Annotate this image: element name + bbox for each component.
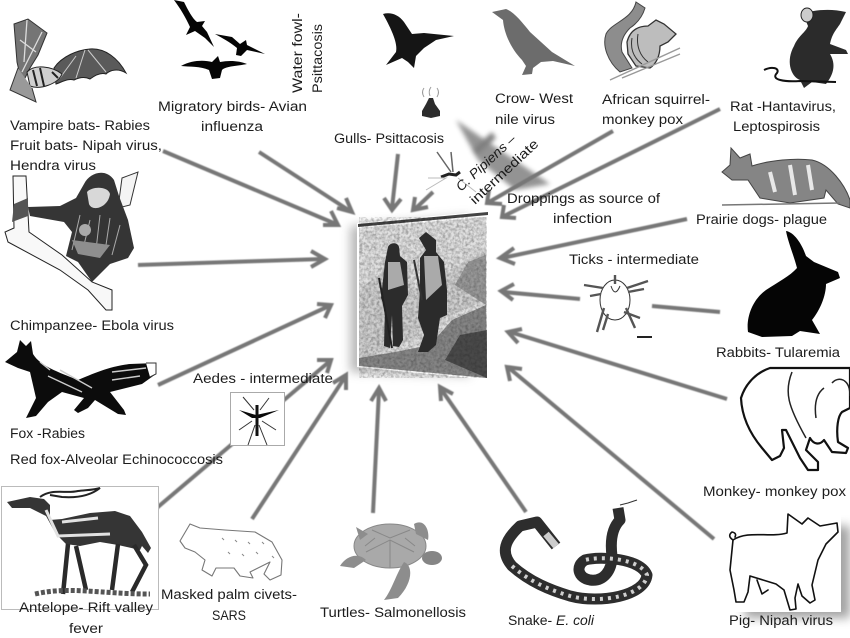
- label: prairie dogs: Prairie dogs- plague: [696, 212, 827, 227]
- label: antelope: Antelope- Rift valley: [19, 600, 153, 615]
- label: African squirrel: African squirrel-: [602, 92, 710, 107]
- icon: antelope in frame: [2, 486, 158, 610]
- label: red fox: Red fox-Alveolar Echinococcosis: [10, 452, 223, 467]
- icon: droppings: [422, 87, 440, 118]
- arrow: pig to centre: [507, 367, 714, 539]
- label: turtles: Turtles- Salmonellosis: [320, 605, 466, 620]
- label: antelope: fever: [69, 621, 104, 636]
- label: vampire and fruit bats: Vampire bats- Rabies: [10, 118, 150, 133]
- label: masked palm civets: [161, 587, 297, 623]
- label: water fowl (vertical): Psittacosis: [310, 24, 325, 93]
- icon: prairie dog: [722, 148, 850, 208]
- label: C. pipiens rotated: intermediate: [467, 136, 541, 207]
- label: crow: Crow- West: [495, 91, 573, 106]
- label: C. pipiens rotated: [453, 131, 541, 207]
- icon: rabbit: [748, 231, 840, 337]
- arrow: fox to centre: [158, 304, 331, 385]
- figure: left man: [381, 243, 408, 348]
- label: African squirrel: monkey pox: [602, 112, 683, 127]
- icon: monkey: [741, 368, 850, 470]
- icon: African squirrel: [605, 2, 680, 80]
- label: antelope: [19, 600, 153, 636]
- icon: eagle: [383, 13, 454, 68]
- label: vampire and fruit bats: Hendra virus: [10, 158, 96, 173]
- arrow: culex mosquito to centre: [413, 192, 433, 210]
- arrow: snake to centre: [440, 387, 526, 512]
- label: water fowl (vertical): Water fowl-: [290, 13, 305, 93]
- figure: right man: [418, 232, 447, 352]
- icon: tick: [584, 275, 652, 337]
- arrow: civet to centre: [252, 375, 346, 519]
- icon: pig with shadowed panel: [727, 512, 850, 618]
- icon: chimpanzee: [5, 172, 138, 310]
- shadow cone behind C. Pipiens label: [456, 120, 550, 190]
- label: monkey: Monkey- monkey pox: [703, 484, 846, 499]
- label: migratory birds: [158, 99, 307, 134]
- label: C. pipiens rotated: C. Pipiens –: [453, 131, 519, 194]
- label: Aedes: Aedes - intermediate: [193, 371, 333, 386]
- label: snake: Snake- E. coli: [508, 613, 595, 628]
- label: rat: [730, 99, 836, 134]
- label: rabbits: Rabbits- Tularemia: [716, 345, 841, 360]
- arrow: turtle to centre: [371, 388, 386, 513]
- arrow: squirrel to centre: [487, 131, 613, 204]
- label: droppings: Droppings as source of: [507, 191, 660, 206]
- label: water fowl (vertical): [290, 13, 325, 93]
- label: fox: Fox -Rabies: [10, 426, 85, 441]
- label: crow: nile virus: [495, 112, 555, 127]
- arrow: migratory birds to centre: [259, 152, 352, 212]
- arrow: monkey to centre: [508, 329, 727, 399]
- label: droppings: infection: [553, 211, 612, 226]
- label: vampire and fruit bats: Fruit bats- Nipah virus,: [10, 138, 162, 153]
- arrow: gulls to centre: [384, 154, 401, 210]
- icon: rat: [764, 8, 848, 88]
- label: migratory birds: Migratory birds- Avian: [158, 99, 307, 114]
- icon: snake: [505, 500, 647, 599]
- icon: migratory birds: [174, 0, 265, 79]
- label: vampire and fruit bats: [10, 118, 162, 173]
- central picture: explorers in landscape: [350, 211, 490, 380]
- label: rat: Leptospirosis: [733, 119, 820, 134]
- icon: culex mosquito: [426, 152, 476, 192]
- icon: vampire bat: [10, 19, 126, 102]
- label: chimpanzee: Chimpanzee- Ebola virus: [10, 318, 174, 333]
- label: masked palm civets: SARS: [212, 608, 246, 623]
- arrow: ticks to centre: [501, 284, 580, 300]
- icon: fox: [5, 340, 156, 418]
- label: migratory birds: influenza: [201, 119, 264, 134]
- label: ticks: Ticks - intermediate: [569, 252, 699, 267]
- arrow: prairie dogs to centre: [500, 219, 687, 264]
- icon: crow: [492, 9, 575, 75]
- label: gulls: Gulls- Psittacosis: [334, 131, 444, 146]
- icon: turtle: [340, 522, 442, 600]
- arrow: rat to centre: [502, 109, 720, 218]
- icon: Aedes mosquito in box: [230, 392, 284, 446]
- label: African squirrel: [602, 92, 710, 127]
- label: masked palm civets: Masked palm civets-: [161, 587, 297, 602]
- connector: rabbit to ticks: [652, 306, 720, 312]
- icon: masked palm civet: [180, 524, 282, 580]
- label: droppings: [507, 191, 660, 226]
- arrow: chimpanzee to centre: [138, 251, 325, 267]
- arrow: bats to centre: [163, 151, 338, 225]
- label: rat: Rat -Hantavirus,: [730, 99, 836, 114]
- label: crow: [495, 91, 573, 127]
- label: pig: Pig- Nipah virus: [729, 613, 833, 628]
- arrow: antelope to centre: [152, 360, 331, 512]
- arrows: [138, 109, 727, 539]
